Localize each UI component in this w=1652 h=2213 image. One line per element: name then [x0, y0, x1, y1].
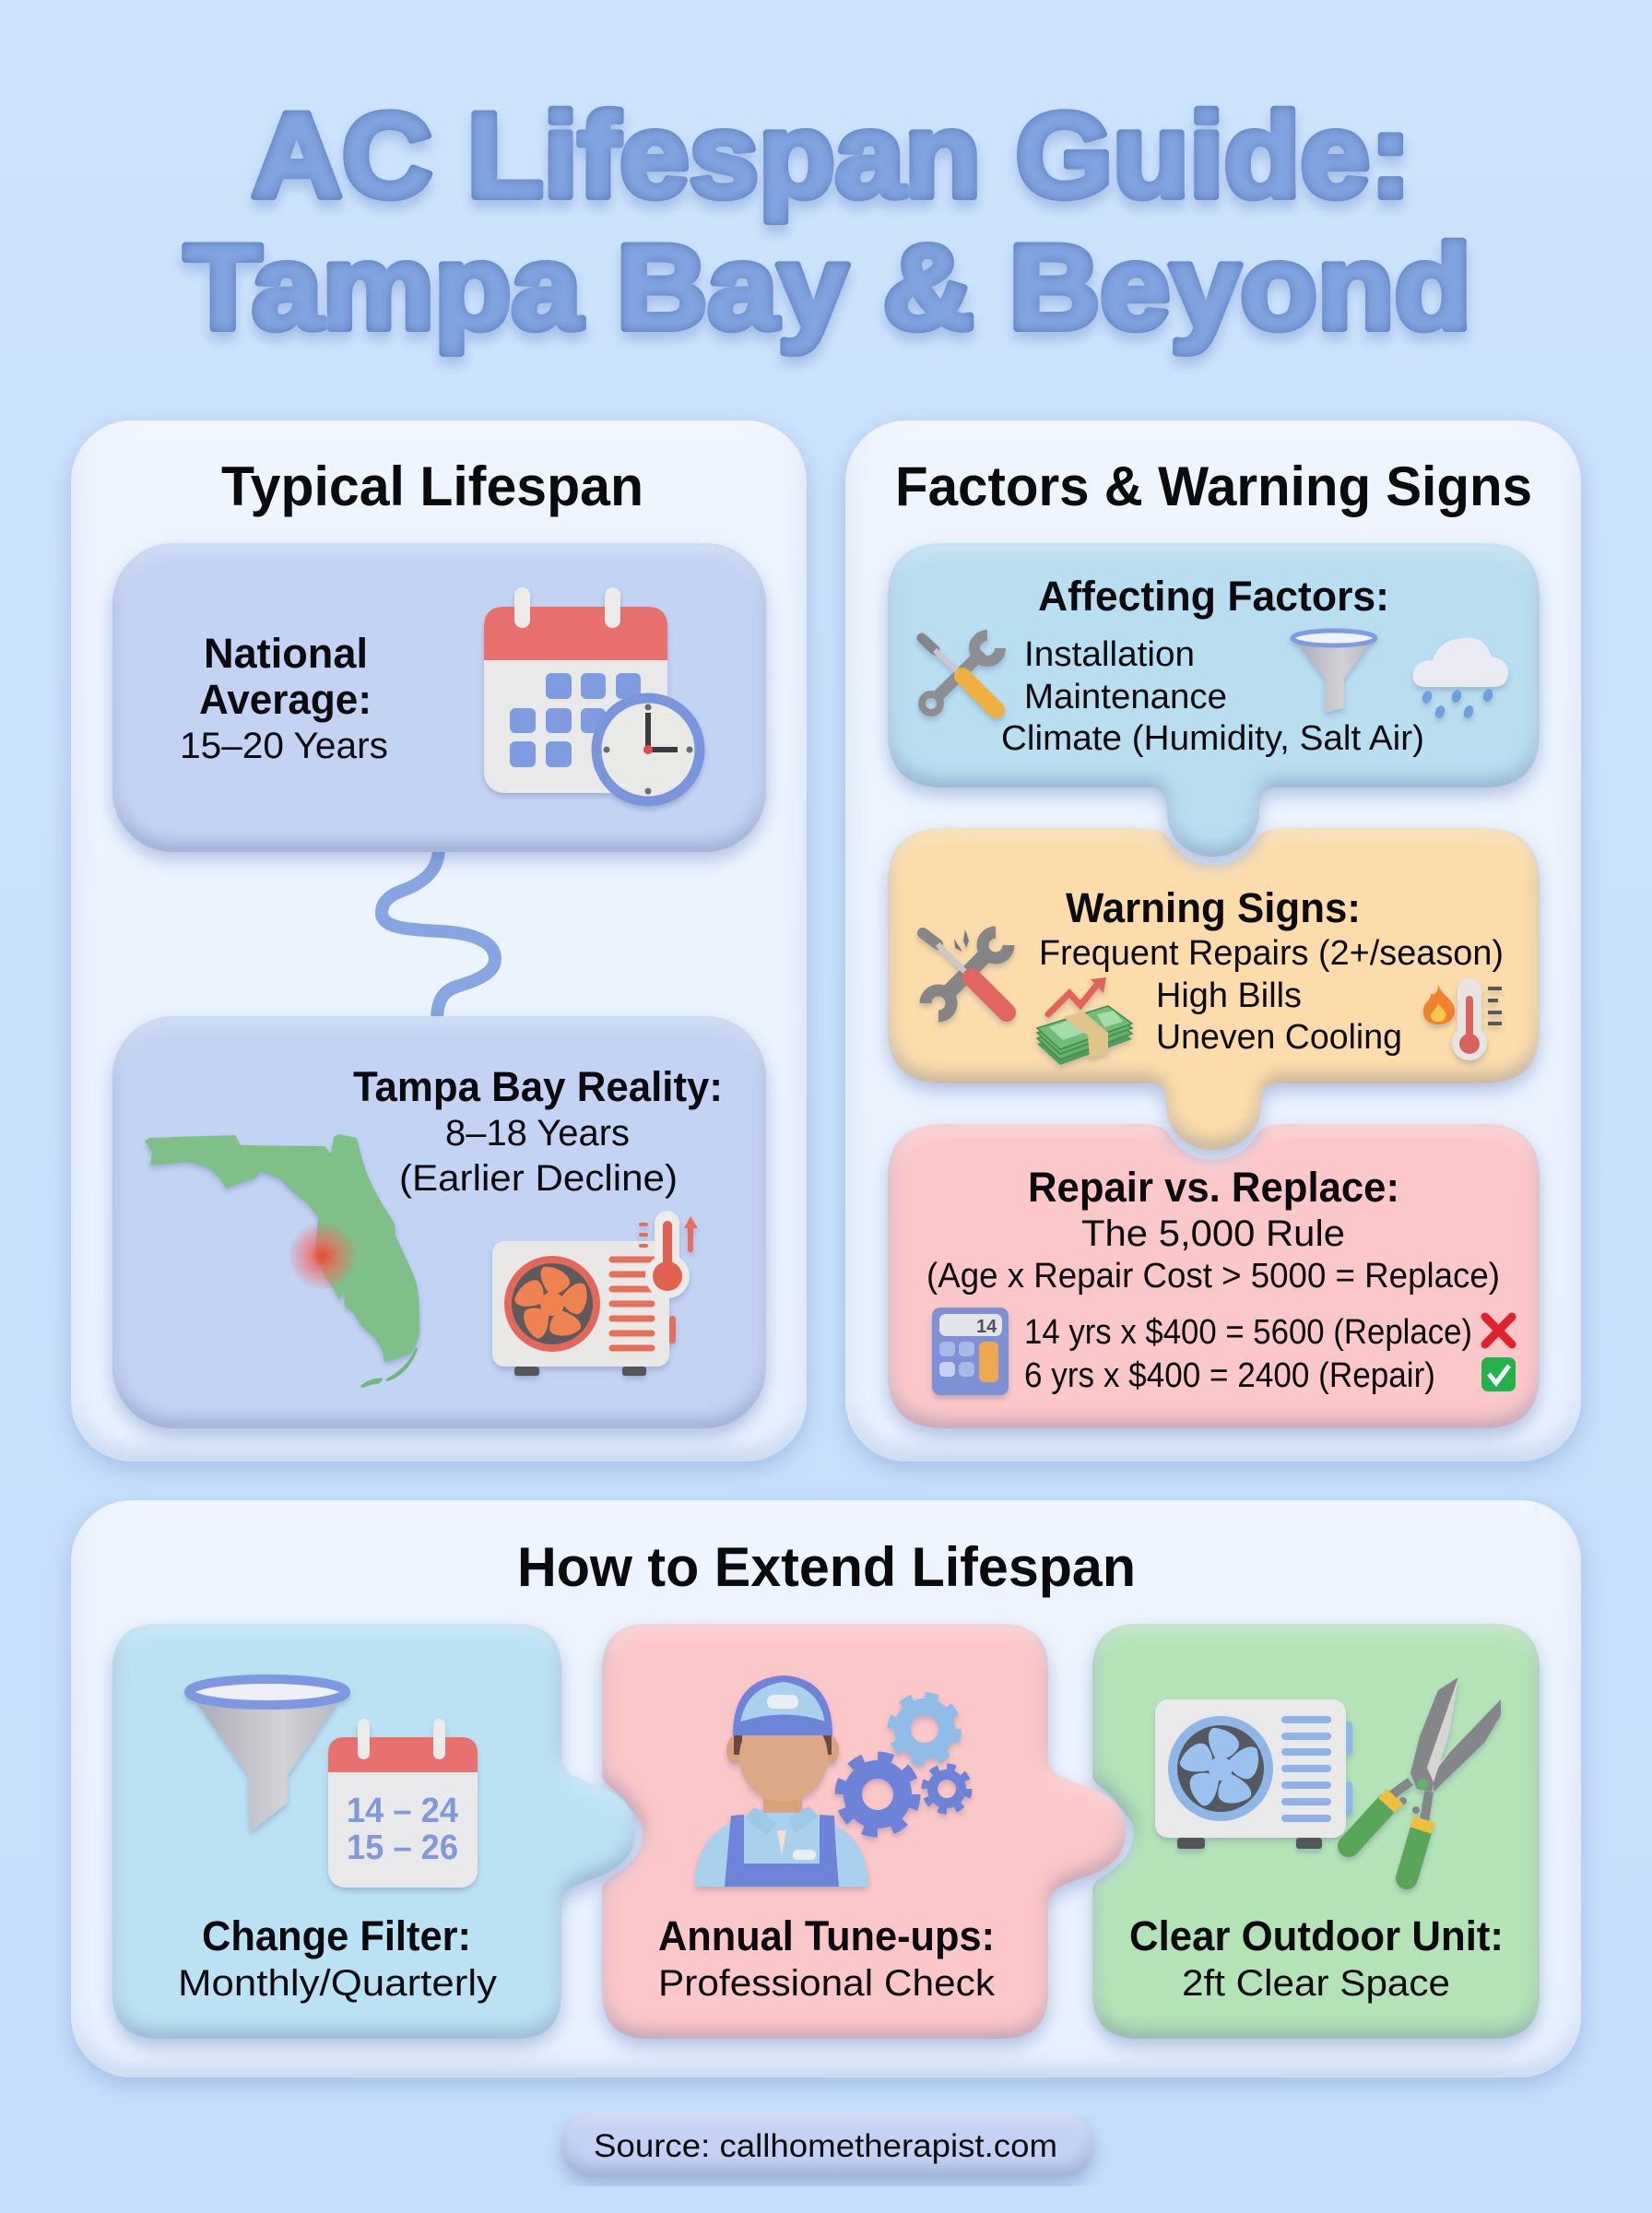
card: national average [112, 543, 766, 852]
text: warning signs: Warning Signs: [1066, 884, 1361, 931]
text: tampa bay reality: 8–18 Years [445, 1113, 630, 1154]
text: repair vs replace: (Age x Repair Cost > 5000 = Replace) [926, 1257, 1500, 1296]
text: repair vs replace [926, 1164, 1500, 1395]
heading: factors and warning signs: Factors & Warning Signs [895, 456, 1532, 517]
panel: factors and warning signs [845, 420, 1581, 1462]
icon: red cross [1485, 1317, 1512, 1344]
text: warning signs [1039, 884, 1504, 1057]
connector: squiggle [382, 848, 495, 1022]
icon: wrench and screwdriver [922, 635, 1000, 713]
icon: broken wrench and screwdriver [923, 929, 1009, 1016]
text: national average: 15–20 Years [180, 726, 388, 766]
icon: garden shears [1349, 1677, 1501, 1878]
text: annual tune-ups: Professional Check [658, 1963, 996, 2004]
text: annual tune-ups [658, 1912, 996, 2004]
text: repair vs replace: 14 yrs x $400 = 5600 (Replace) [1024, 1313, 1472, 1352]
card: tampa bay reality [112, 1016, 766, 1428]
icon: calendar with dates [328, 1719, 478, 1888]
card: warning signs [888, 828, 1540, 1150]
text: tampa bay reality: Tampa Bay Reality: [353, 1063, 723, 1110]
text: affecting factors: Installation [1024, 635, 1195, 674]
icon: large funnel [189, 1679, 346, 1832]
title [184, 88, 1471, 354]
icon: calculator [932, 1308, 1009, 1395]
icon: flame and thermometer [1423, 978, 1502, 1060]
text: national average: Average: [199, 676, 372, 723]
title: AC Lifespan Guide: [252, 88, 1411, 222]
text: tampa bay reality [353, 1063, 723, 1199]
text: affecting factors: Maintenance [1024, 678, 1227, 716]
icon: calculator: 14 [976, 1317, 997, 1337]
title: Tampa Bay & Beyond [184, 219, 1471, 354]
card: change filter [112, 1624, 635, 2039]
panel: how to extend lifespan [71, 1500, 1581, 2077]
heading: typical lifespan: Typical Lifespan [221, 456, 643, 517]
map: florida with tampa highlight [145, 1134, 419, 1387]
text: affecting factors: Climate (Humidity, Salt Air) [1001, 719, 1424, 758]
icon: calendar with clock [484, 587, 700, 801]
icon: calendar with dates: 15 – 26 [347, 1828, 458, 1867]
text: change filter [178, 1912, 497, 2004]
icon: green check [1481, 1357, 1516, 1391]
text: clear outdoor unit: 2ft Clear Space [1182, 1963, 1450, 2004]
icon: gears [840, 1697, 969, 1832]
text: affecting factors [1001, 573, 1424, 758]
card: annual tune-ups [602, 1624, 1126, 2039]
text: national average: National [204, 630, 368, 677]
text: warning signs: Uneven Cooling [1156, 1018, 1402, 1057]
heading: how to extend lifespan: How to Extend Lifespan [517, 1536, 1136, 1598]
text: change filter: Change Filter: [202, 1912, 471, 1959]
source pill [561, 2112, 1093, 2177]
icon: rising bills money stack [1037, 977, 1132, 1065]
text: warning signs: High Bills [1156, 976, 1302, 1015]
text: clear outdoor unit [1129, 1912, 1504, 2004]
text: clear outdoor unit: Clear Outdoor Unit: [1129, 1912, 1504, 1959]
text: warning signs: Frequent Repairs (2+/season) [1039, 934, 1504, 973]
text: national average [180, 630, 388, 766]
icon: calendar with dates: 14 – 24 [347, 1792, 458, 1830]
card: affecting factors [888, 543, 1540, 857]
text: annual tune-ups: Annual Tune-ups: [658, 1912, 995, 1959]
text: repair vs replace: Repair vs. Replace: [1028, 1164, 1399, 1211]
text: affecting factors: Affecting Factors: [1038, 573, 1389, 620]
card: clear outdoor unit [1092, 1624, 1540, 2039]
text: tampa bay reality: (Earlier Decline) [399, 1158, 678, 1199]
icon: funnel filter [1292, 631, 1375, 713]
icon: technician [695, 1675, 868, 1887]
panel: typical lifespan [71, 420, 807, 1462]
icon: hot outdoor ac unit [492, 1211, 698, 1376]
text: change filter: Monthly/Quarterly [178, 1963, 497, 2004]
text: repair vs replace: The 5,000 Rule [1081, 1213, 1345, 1254]
icon: rain cloud [1413, 637, 1508, 719]
source text: Source: callhometherapist.com [594, 2128, 1057, 2164]
text: repair vs replace: 6 yrs x $400 = 2400 (Repair) [1024, 1356, 1435, 1395]
icon: clean outdoor ac unit [1155, 1699, 1352, 1849]
card: repair vs replace [888, 1124, 1540, 1428]
